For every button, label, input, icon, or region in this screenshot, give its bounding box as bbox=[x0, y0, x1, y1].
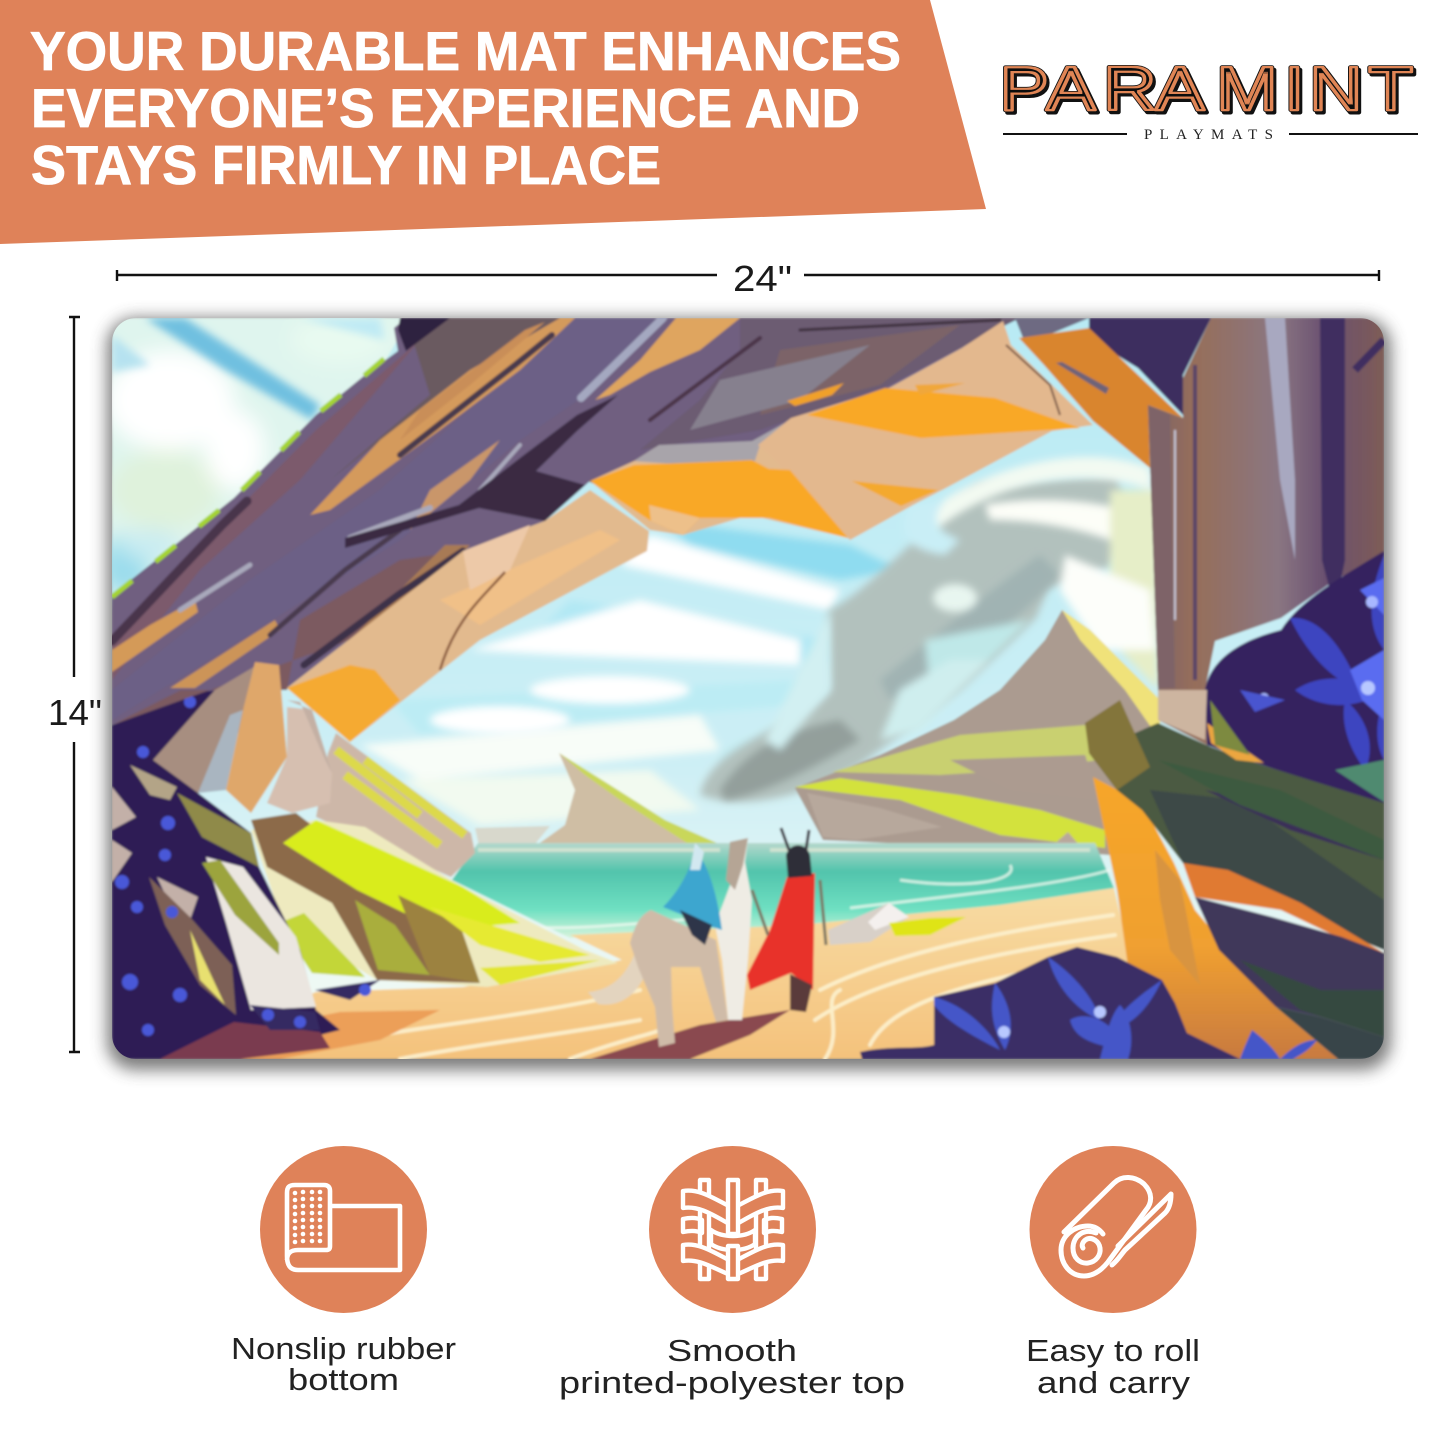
icon: rolled mat bbox=[1030, 1146, 1196, 1313]
feature: smooth polyester top bbox=[559, 1146, 905, 1400]
upper-left sky bbox=[112, 318, 402, 600]
label: smooth printed-polyester top bbox=[559, 1333, 905, 1400]
right flowers bbox=[1205, 551, 1384, 805]
left foliage and rocks bbox=[112, 680, 380, 1059]
arch underlay bbox=[590, 445, 848, 538]
logo: Paramint Playmats: PLAYMATS bbox=[1144, 127, 1273, 143]
label: smooth printed-polyester top: printed-polyester top bbox=[559, 1365, 905, 1400]
left slopes bbox=[251, 733, 618, 987]
label: easy to roll and carry bbox=[1026, 1333, 1200, 1400]
dimension: width 24 inches bbox=[117, 258, 1379, 299]
label: easy to roll and carry: and carry bbox=[1037, 1365, 1191, 1400]
white horse with rider bbox=[588, 838, 752, 1047]
title heading bbox=[30, 20, 901, 196]
bottom flowers bbox=[860, 947, 1317, 1059]
feature: easy to roll and carry bbox=[1026, 1146, 1200, 1400]
icon: rubber mat corner bbox=[260, 1146, 427, 1313]
arch underside plate bbox=[286, 458, 768, 743]
title heading: STAYS FIRMLY IN PLACE bbox=[31, 134, 661, 196]
label: easy to roll and carry: Easy to roll bbox=[1026, 1333, 1200, 1368]
logo: Paramint Playmats: PARAMINT bbox=[999, 54, 1413, 124]
distant rock centre bbox=[475, 753, 728, 850]
label: smooth printed-polyester top: Smooth bbox=[667, 1333, 797, 1368]
label: nonslip rubber bottom: bottom bbox=[288, 1362, 399, 1397]
logo: Paramint Playmats: PARAMINT bbox=[1002, 56, 1416, 126]
right ledge cliff bbox=[1085, 690, 1384, 1059]
dimension: width 24 inches: 24" bbox=[733, 258, 792, 299]
icon: woven fabric bbox=[649, 1146, 816, 1313]
title banner bbox=[0, 0, 986, 244]
title heading: YOUR DURABLE MAT ENHANCES bbox=[30, 20, 901, 82]
logo: Paramint Playmats: PARAMINT bbox=[999, 54, 1413, 124]
right pillar bbox=[1015, 318, 1384, 745]
feature: nonslip rubber bottom bbox=[231, 1146, 456, 1397]
storm cloud mass bbox=[700, 457, 1158, 802]
label: nonslip rubber bottom bbox=[231, 1331, 456, 1397]
main rock arch bbox=[112, 318, 1020, 725]
arch underside tan block bbox=[750, 321, 1093, 540]
boulders bbox=[153, 662, 332, 813]
red cloaked figure bbox=[747, 828, 826, 1012]
sandy path bbox=[240, 887, 1129, 1059]
distant mountain right bbox=[795, 610, 1160, 855]
dimension: height 14 inches bbox=[48, 317, 102, 1052]
title heading: EVERYONE’S EXPERIENCE AND bbox=[31, 77, 860, 139]
central sky bbox=[360, 520, 900, 825]
mat shadow bbox=[107, 318, 1391, 1070]
sea bbox=[452, 843, 1114, 938]
dimension: height 14 inches: 14" bbox=[48, 692, 102, 733]
label: nonslip rubber bottom: Nonslip rubber bbox=[231, 1331, 456, 1366]
playmat artwork bbox=[100, 315, 1384, 1059]
logo: Paramint Playmats: PARAMINT bbox=[999, 54, 1413, 124]
